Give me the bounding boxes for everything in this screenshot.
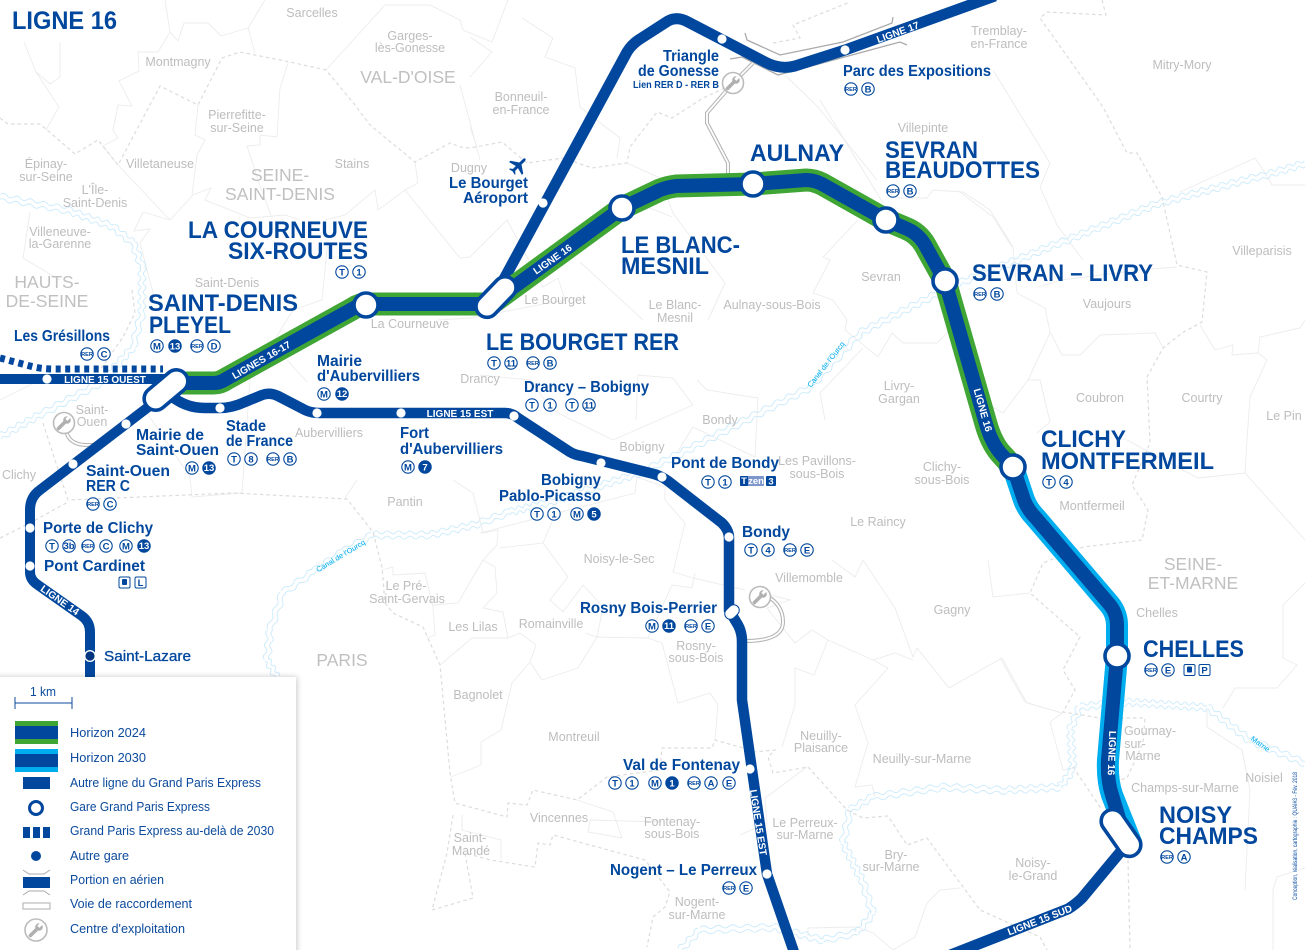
station: Val de Fontenay: 1 xyxy=(669,778,675,790)
station: Le Bourget RER: LE BOURGET RER xyxy=(486,329,679,356)
legend: other station: Autre gare xyxy=(70,848,129,863)
river: Canal de l'Ourcq xyxy=(263,159,1305,679)
station: Porte de Clichy: 3b xyxy=(63,541,75,552)
station: Bobigny Pablo-Picasso: T xyxy=(534,510,540,520)
grey place names: Bry- xyxy=(885,848,907,862)
station: Val de Fontenay: RER xyxy=(688,781,700,787)
grey place names: Villetaneuse xyxy=(126,157,194,171)
grey place names: la-Garenne xyxy=(29,237,91,251)
grey place names: Saint- xyxy=(76,403,108,417)
station: Drancy - Bobigny: 1 xyxy=(547,400,553,412)
line: Ligne 15 Ouest beyond 2030 (dashed) xyxy=(0,358,163,369)
grey place names: Neuilly- xyxy=(800,729,842,743)
station: Mairie d'Aubervilliers: M xyxy=(320,390,328,400)
station: Mairie d'Aubervilliers: Mairie xyxy=(317,353,362,370)
grey place names: Saint-Denis xyxy=(63,196,127,210)
station: Mairie de Saint-Ouen xyxy=(136,427,219,474)
station: Stade de France: de France xyxy=(226,433,293,450)
station: Nogent - Le Perreux xyxy=(610,862,757,894)
station: Pont de Bondy: zen xyxy=(748,476,764,487)
grey place names: Aulnay-sous-Bois xyxy=(723,298,821,312)
station: Bobigny Pablo-Picasso: Pablo-Picasso xyxy=(499,488,601,505)
grey place names: Coubron xyxy=(1076,391,1124,405)
station: Noisy Champs: NOISY xyxy=(1159,802,1232,829)
station: Saint-Denis Pleyel: SAINT-DENIS xyxy=(148,290,298,317)
station: Chelles xyxy=(1143,636,1244,676)
grey place names: Aubervilliers xyxy=(295,426,363,440)
station: Saint-Denis Pleyel: RER xyxy=(191,344,203,350)
line: Ligne 15 Est xyxy=(170,394,795,950)
line: Ligne 15 Ouest xyxy=(0,374,168,384)
station: Triangle de Gonesse xyxy=(633,48,719,91)
grey place names: Villemomble xyxy=(775,571,843,585)
station: Saint-Ouen RER C: RER C xyxy=(86,478,130,495)
station: Val de Fontenay: M xyxy=(651,778,659,790)
station: Aulnay: AULNAY xyxy=(750,140,844,167)
station: Stade de France xyxy=(226,418,296,466)
grey place names: Le Blanc- xyxy=(649,298,701,312)
station: Pont de Bondy: 1 xyxy=(722,478,728,488)
grey place names: Gagny xyxy=(934,603,971,617)
grey place names: Marne xyxy=(1125,749,1161,763)
station: Val de Fontenay: A xyxy=(708,778,715,790)
grey place names: sur-Marne xyxy=(669,908,726,922)
station: Fort d'Aubervilliers: d'Aubervilliers xyxy=(400,441,503,458)
station: Sevran Beaudottes: B xyxy=(907,186,914,198)
station: Pont de Bondy: T xyxy=(705,478,711,488)
river: Marne xyxy=(677,698,1305,950)
station: Chelles: CHELLES xyxy=(1143,636,1244,663)
grey place names: Épinay- xyxy=(25,156,67,171)
station: Le Bourget Aeroport: Le Bourget xyxy=(449,175,528,192)
grey place names: La Courneuve xyxy=(371,317,449,331)
grey place names: Clichy xyxy=(2,468,37,482)
station: Noisy Champs xyxy=(1159,802,1258,864)
line labels: LIGNE 14 xyxy=(38,584,81,618)
station: Nogent - Le Perreux: Nogent – Le Perreux xyxy=(610,862,757,879)
grey place names: sur- xyxy=(1124,737,1146,751)
line: Ligne 17 xyxy=(497,0,995,292)
line labels: LIGNE 17 xyxy=(875,20,921,46)
station: Saint-Lazare: Saint-Lazare xyxy=(104,648,191,665)
grey place names: Le Bourget xyxy=(524,293,586,307)
grey place names: Sevran xyxy=(861,270,901,284)
station: Porte de Clichy: Porte de Clichy xyxy=(43,520,153,537)
station: Saint-Ouen RER C xyxy=(86,463,170,510)
station: Clichy Montfermeil: 4 xyxy=(1063,478,1069,488)
station: Triangle de Gonesse: Lien RER D - RER B xyxy=(633,80,719,91)
station: Mairie de Saint-Ouen: M xyxy=(188,464,196,474)
station: Triangle de Gonesse: de Gonesse xyxy=(638,63,719,80)
station: Bobigny Pablo-Picasso: 1 xyxy=(551,510,557,520)
grey place names: Courtry xyxy=(1182,391,1223,405)
connecting track: Saint-Ouen depot xyxy=(66,430,105,445)
grey place names: Rosny- xyxy=(676,639,716,653)
title: LIGNE 16 xyxy=(12,7,117,35)
station: Parc des Expositions xyxy=(843,63,991,96)
station: Bobigny Pablo-Picasso: Bobigny xyxy=(541,472,601,489)
station: Sevran Beaudottes: BEAUDOTTES xyxy=(885,157,1040,184)
station: Bondy xyxy=(742,524,813,556)
grey place names: en-France xyxy=(971,37,1028,51)
station: Porte de Clichy xyxy=(43,520,153,552)
station: Le Bourget RER: T xyxy=(491,358,497,370)
station: Mairie de Saint-Ouen: 13 xyxy=(204,463,214,474)
station: Saint-Ouen RER C: RER xyxy=(87,502,99,508)
station: Pont de Bondy: T xyxy=(741,476,747,487)
grey place names: Vincennes xyxy=(530,811,588,825)
grey place names: Vaujours xyxy=(1083,297,1131,311)
station: Bobigny Pablo-Picasso xyxy=(499,472,601,520)
station: Stade de France: Stade xyxy=(226,418,266,435)
station: Rosny Bois-Perrier: M xyxy=(648,622,656,632)
scale bar: 1 km xyxy=(30,685,56,699)
river: Seine xyxy=(0,193,146,440)
station: Sevran Beaudottes xyxy=(885,137,1040,198)
station: Chelles: RER xyxy=(1145,668,1157,674)
station: Triangle de Gonesse: Triangle xyxy=(663,48,719,65)
station: Le Bourget RER: 11 xyxy=(506,358,517,370)
station: Drancy - Bobigny: Drancy – Bobigny xyxy=(524,379,649,396)
station: Rosny Bois-Perrier: Rosny Bois-Perrier xyxy=(580,600,717,617)
scale bar xyxy=(15,685,72,709)
legend: aerial section xyxy=(23,870,164,895)
station: Val de Fontenay: T xyxy=(612,778,618,790)
station: Saint-Ouen RER C: C xyxy=(107,500,114,510)
grey place names: ET-MARNE xyxy=(1148,573,1238,593)
legend: Horizon 2024: Horizon 2024 xyxy=(70,725,146,740)
station: Chelles: E xyxy=(1165,666,1171,676)
station: Porte de Clichy: M xyxy=(122,542,130,552)
grey place names: Gournay- xyxy=(1124,724,1176,738)
station: Sevran Beaudottes: SEVRAN xyxy=(885,137,978,164)
station: Les Gresillons xyxy=(14,328,110,360)
station: Mairie de Saint-Ouen: Mairie de xyxy=(136,427,204,444)
station: Bondy: Bondy xyxy=(742,524,790,541)
credit line: Conception, réalisation, cartographie : QUAI#3 - Fév. 2018 xyxy=(1292,772,1299,900)
station: Clichy Montfermeil: CLICHY xyxy=(1041,426,1126,453)
connecting track: Rosny depot xyxy=(745,596,783,641)
station: Clichy Montfermeil: T xyxy=(1046,478,1052,488)
line labels: LIGNE 15 OUEST xyxy=(64,375,146,386)
station: Bondy: 4 xyxy=(765,546,771,556)
legend: Horizon 2024 xyxy=(15,721,146,744)
station: Pont de Bondy: Pont de Bondy xyxy=(671,455,779,472)
grey place names: Montreuil xyxy=(548,730,600,744)
station: Le Bourget RER: B xyxy=(547,358,554,370)
station: Stade de France: T xyxy=(231,454,237,466)
station: Stade de France: RER xyxy=(267,457,279,463)
line labels: LIGNE 15 EST xyxy=(427,409,493,420)
station: Mairie d'Aubervilliers: 12 xyxy=(337,389,347,400)
station: La Courneuve Six-Routes: 1 xyxy=(356,268,362,278)
legend: other station xyxy=(31,848,129,863)
grey place names: SEINE- xyxy=(251,165,309,185)
station: Val de Fontenay: E xyxy=(726,778,732,790)
river names: Canal de l'Ourcq xyxy=(805,340,847,389)
grey place names: Le Pin xyxy=(1266,409,1302,423)
line: Ligne 14 xyxy=(30,398,160,680)
grey place names: le-Grand xyxy=(1009,869,1057,883)
river names: Canal de l'Ourcq xyxy=(315,538,367,574)
line labels: LIGNE 15 EST xyxy=(747,789,768,856)
station: Sevran - Livry: RER xyxy=(974,292,986,298)
station: Chelles: P xyxy=(1201,666,1208,676)
grey place names: sur-Seine xyxy=(19,170,73,184)
grey place names: Villeneuve- xyxy=(29,225,91,239)
station: Parc des Expositions: Parc des Expositions xyxy=(843,63,991,80)
station: Les Gresillons: C xyxy=(101,350,108,360)
line: Ligne 15 Sud xyxy=(930,850,1122,950)
station: Clichy Montfermeil xyxy=(1041,426,1214,488)
station: Sevran - Livry xyxy=(972,260,1153,300)
station: Stade de France: 8 xyxy=(248,454,254,466)
station: Bobigny Pablo-Picasso: 5 xyxy=(591,510,597,520)
aerial section markers along ligne 17 xyxy=(730,17,907,75)
grey place names: Noisiel xyxy=(1245,771,1283,785)
grey place names: PARIS xyxy=(316,650,368,670)
grey place names: Villeparisis xyxy=(1232,244,1292,258)
grey place names: Saint-Gervais xyxy=(369,592,445,606)
grey place names: sous-Bois xyxy=(915,473,969,487)
line labels: LIGNES 16-17 xyxy=(231,339,293,382)
station: Le Blanc-Mesnil xyxy=(621,232,740,280)
legend: depot wrench xyxy=(25,919,185,941)
line labels xyxy=(38,20,1117,938)
station: Pont de Bondy: 3 xyxy=(768,476,774,488)
station: Pont Cardinet: Pont Cardinet xyxy=(44,558,145,575)
station: La Courneuve Six-Routes xyxy=(188,217,368,278)
station: Fort d'Aubervilliers xyxy=(400,425,503,474)
connecting track: Aulnay to Gonesse depot xyxy=(707,63,753,177)
grey place names: Pierrefitte- xyxy=(208,108,266,122)
grey place names: Romainville xyxy=(519,617,583,631)
grey place names: Nogent- xyxy=(675,895,719,909)
grey place names: sous-Bois xyxy=(669,651,723,665)
icon: wrench Gonesse depot xyxy=(722,72,744,94)
grey place names: Champs-sur-Marne xyxy=(1131,781,1239,795)
station: Sevran - Livry: SEVRAN – LIVRY xyxy=(972,260,1153,287)
station: Rosny Bois-Perrier: 11 xyxy=(664,621,675,632)
grey place names: Plaisance xyxy=(794,741,848,755)
legend: Horizon 2030: Horizon 2030 xyxy=(70,750,146,765)
icon: wrench Saint-Ouen depot xyxy=(54,412,74,434)
grey place names: Mandé xyxy=(452,844,490,858)
grey place names: DE-SEINE xyxy=(6,291,88,311)
grey place names: Bagnolet xyxy=(453,688,503,702)
station: La Courneuve Six-Routes: SIX-ROUTES xyxy=(228,238,368,265)
station: Noisy Champs: A xyxy=(1181,852,1188,864)
station: Val de Fontenay: 1 xyxy=(629,778,635,790)
grey place names: SAINT-DENIS xyxy=(225,184,335,204)
interchange stations (large) xyxy=(139,172,1145,861)
grey place names: Le Raincy xyxy=(850,515,907,529)
station: Le Bourget Aeroport xyxy=(449,175,528,207)
grey place names: Montfermeil xyxy=(1059,499,1125,513)
legend background xyxy=(0,677,296,950)
grey place names: SEINE- xyxy=(1164,554,1222,574)
station: Bondy: RER xyxy=(784,548,796,554)
station: Fort d'Aubervilliers: Fort xyxy=(400,425,429,442)
grey place names: sur-Seine xyxy=(210,121,264,135)
station: Val de Fontenay: Val de Fontenay xyxy=(623,757,740,774)
station: Drancy - Bobigny xyxy=(524,379,649,412)
station: Le Bourget RER: RER xyxy=(527,361,539,367)
grey place names: HAUTS- xyxy=(14,272,80,292)
grey place names: Dugny xyxy=(451,161,488,175)
station: Les Gresillons: Les Grésillons xyxy=(14,328,110,345)
legend: Horizon 2030 xyxy=(15,749,146,772)
station: Le Bourget Aeroport: Aéroport xyxy=(463,190,528,207)
grey place names: Garges- xyxy=(387,29,433,43)
grey place names: en-France xyxy=(493,103,550,117)
grey place names: Fontenay- xyxy=(644,815,700,829)
grey place names: Mesnil xyxy=(657,311,693,325)
river names: Marne xyxy=(1249,734,1272,754)
station: Noisy Champs: RER xyxy=(1161,855,1173,861)
legend: other line: Autre ligne du Grand Paris Express xyxy=(70,775,261,790)
grey place names: Mitry-Mory xyxy=(1152,58,1212,72)
station: Drancy - Bobigny: T xyxy=(569,400,575,412)
station: Rosny Bois-Perrier: E xyxy=(705,622,711,632)
grey place names: VAL-D'OISE xyxy=(360,67,456,87)
grey place names: Villepinte xyxy=(898,121,948,135)
grey place names: Stains xyxy=(335,157,369,171)
station: Nogent - Le Perreux: RER xyxy=(723,886,735,892)
station: Porte de Clichy: RER xyxy=(82,544,94,550)
station: Mairie d'Aubervilliers xyxy=(317,353,420,400)
station: Parc des Expositions: B xyxy=(865,84,872,96)
station: Le Blanc-Mesnil: MESNIL xyxy=(621,253,709,280)
legend: GPE station: Gare Grand Paris Express xyxy=(70,799,210,814)
legend: beyond 2030: Grand Paris Express au-delà de 2030 xyxy=(70,823,274,838)
station: Clichy Montfermeil: MONTFERMEIL xyxy=(1041,448,1214,475)
icon: airplane xyxy=(506,152,532,178)
small stations xyxy=(25,34,850,879)
station: Saint-Denis Pleyel: 13 xyxy=(170,342,180,352)
grey place names: Sarcelles xyxy=(286,6,338,20)
station: Sevran Beaudottes: RER xyxy=(887,189,899,195)
grey place names: Les Lilas xyxy=(448,620,498,634)
grey place names: Gargan xyxy=(878,392,920,406)
grey place names: Les Pavillons- xyxy=(778,454,856,468)
station: Saint-Denis Pleyel xyxy=(148,290,298,352)
station: Bondy: T xyxy=(748,546,754,556)
grey place names: Bobigny xyxy=(619,440,665,454)
station: Parc des Expositions: RER xyxy=(845,87,857,93)
grey place names: Noisy-le-Sec xyxy=(584,552,654,566)
station: Porte de Clichy: T xyxy=(49,542,55,552)
station: Saint-Denis Pleyel: M xyxy=(153,342,161,352)
line labels: LIGNE 16 xyxy=(971,387,994,434)
legend: depot wrench: Centre d'exploitation xyxy=(70,921,185,936)
station: Saint-Denis Pleyel: PLEYEL xyxy=(149,312,231,339)
station: Pont Cardinet xyxy=(44,558,146,589)
station: Mairie de Saint-Ouen: Saint-Ouen xyxy=(136,442,219,459)
river names xyxy=(315,340,1272,754)
grey place names: Pantin xyxy=(387,495,423,509)
grey place names: sous-Bois xyxy=(790,467,844,481)
station: Pont de Bondy xyxy=(671,455,779,488)
grey place names: Saint- xyxy=(454,831,486,845)
grey place names: Noisy- xyxy=(1015,856,1051,870)
line: Ligne 16 horizon 2024 green band xyxy=(170,180,1013,467)
station: Le Blanc-Mesnil: LE BLANC- xyxy=(621,232,740,259)
station: Fort d'Aubervilliers: 7 xyxy=(422,462,428,474)
station: Bobigny Pablo-Picasso: M xyxy=(573,510,581,520)
legend: aerial section: Portion en aérien xyxy=(70,872,164,887)
station: Le Bourget RER xyxy=(486,329,679,370)
station: Nogent - Le Perreux: E xyxy=(743,884,749,894)
grey place names: sur-Marne xyxy=(777,828,834,842)
grey place names: Livry- xyxy=(884,379,914,393)
station: Sevran - Livry: B xyxy=(994,290,1001,300)
icon: wrench Rosny depot xyxy=(750,586,770,608)
station: Stade de France: B xyxy=(287,454,294,466)
grey place names: Saint-Denis xyxy=(195,276,259,290)
station: Drancy - Bobigny: 11 xyxy=(584,400,595,412)
station: Fort d'Aubervilliers: M xyxy=(404,462,412,474)
station: Bondy: E xyxy=(804,546,810,556)
station: Rosny Bois-Perrier xyxy=(580,600,717,632)
station: Drancy - Bobigny: T xyxy=(529,400,535,412)
grey place names: Chelles xyxy=(1136,606,1178,620)
grey place names: Ouen xyxy=(77,415,107,429)
station: La Courneuve Six-Routes: T xyxy=(339,268,345,278)
station: Pont Cardinet: L xyxy=(138,578,144,589)
grey place names: sous-Bois xyxy=(645,827,699,841)
grey place names: Clichy- xyxy=(923,460,961,474)
station: Porte de Clichy: 13 xyxy=(139,541,149,552)
grey place names: Bondy xyxy=(702,413,738,427)
station: Porte de Clichy: C xyxy=(103,542,110,552)
grey place names: Le Perreux- xyxy=(772,816,838,830)
station: Saint-Ouen RER C: Saint-Ouen xyxy=(86,463,170,480)
line labels: LIGNE 15 SUD xyxy=(1006,904,1074,938)
grey place names: Tremblay- xyxy=(971,24,1027,38)
legend: connecting track: Voie de raccordement xyxy=(70,896,192,911)
station: Rosny Bois-Perrier: RER xyxy=(685,624,697,630)
station: Saint-Denis Pleyel: D xyxy=(211,342,218,352)
line labels: LIGNE 16 xyxy=(1105,731,1117,776)
grey place names: Neuilly-sur-Marne xyxy=(873,752,971,766)
grey place names: Montmagny xyxy=(145,55,211,69)
grey place names: lès-Gonesse xyxy=(375,41,445,55)
station: Noisy Champs: CHAMPS xyxy=(1159,823,1258,850)
station: La Courneuve Six-Routes: LA COURNEUVE xyxy=(188,217,368,244)
station: Mairie d'Aubervilliers: d'Aubervilliers xyxy=(317,368,420,385)
line: Ligne 16 core xyxy=(170,180,1125,838)
grey place names: Le Pré- xyxy=(386,579,426,593)
station: Val de Fontenay xyxy=(609,757,740,790)
panel: legend xyxy=(0,677,296,950)
grey place names: Bonneuil- xyxy=(495,90,547,104)
line: Ligne 16 horizon 2030 cyan band xyxy=(1013,467,1132,845)
grey place names: Drancy xyxy=(460,372,501,386)
line labels: LIGNE 16 xyxy=(532,242,575,277)
grey place names: sur-Marne xyxy=(863,860,920,874)
grey place names: L'Île- xyxy=(82,182,108,197)
station: Les Gresillons: RER xyxy=(81,352,93,358)
